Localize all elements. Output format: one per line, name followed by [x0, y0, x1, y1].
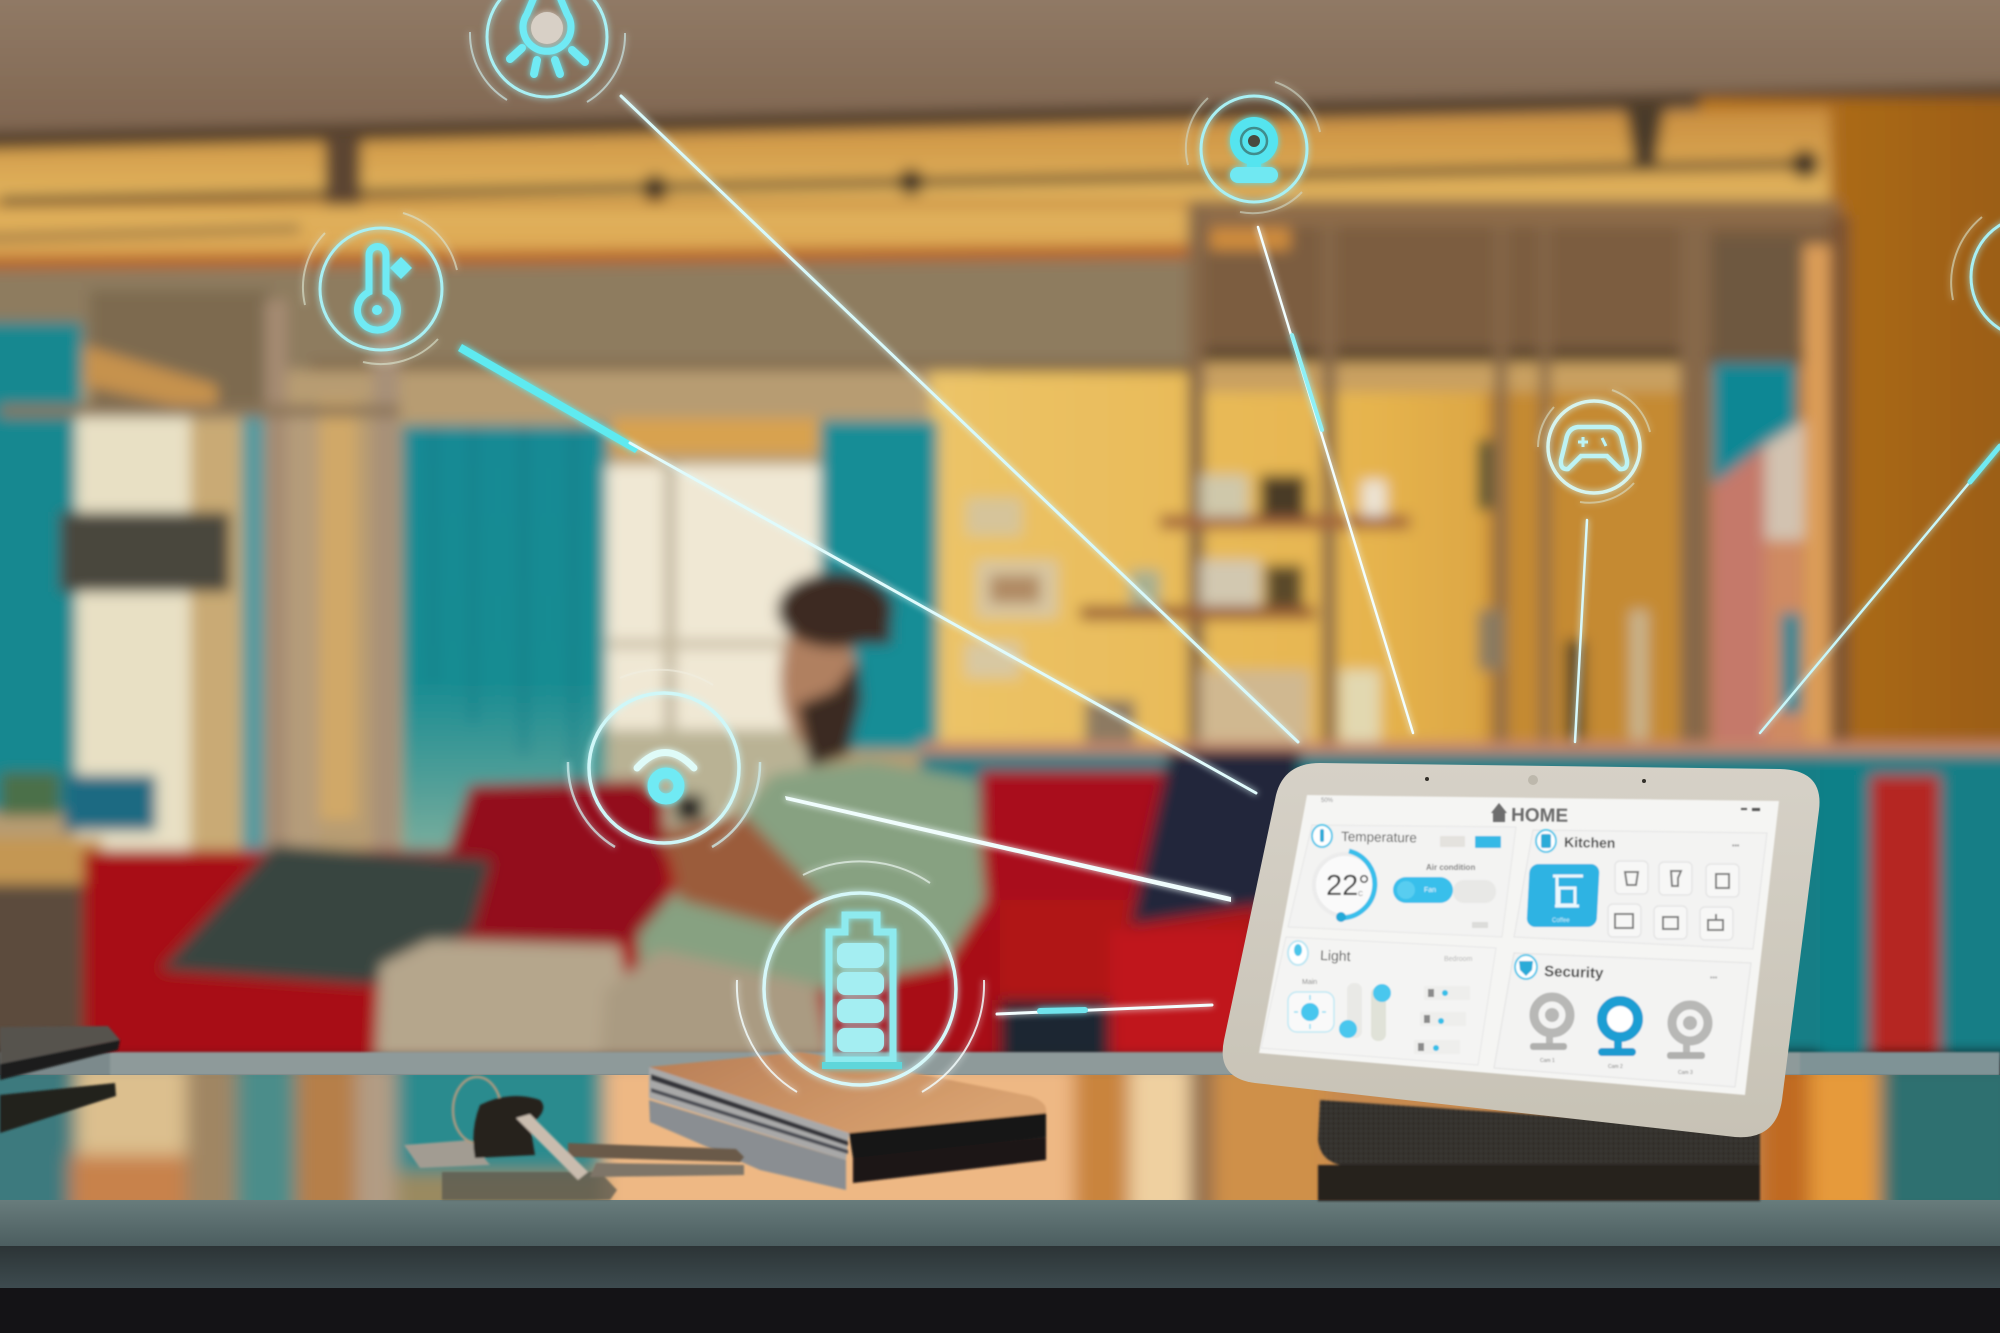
screen — [1259, 795, 1779, 1095]
sofa right cushions — [980, 770, 1180, 930]
panel: light: Bedroom — [1444, 956, 1473, 963]
ceiling light band — [0, 108, 1830, 262]
centre curtain — [402, 425, 608, 855]
home heading — [1491, 803, 1568, 827]
icon: wifi phone hologram — [568, 670, 760, 847]
flat key head — [404, 1140, 490, 1168]
sensors — [1425, 777, 1429, 781]
soffit — [0, 258, 1250, 380]
phone in hand — [675, 795, 703, 821]
yellow wall centre-right — [930, 372, 1730, 762]
panel: temperature: Fan — [1424, 887, 1436, 894]
air condition toggle: Air condition — [1426, 863, 1475, 872]
smart display base — [1318, 1100, 1760, 1201]
appliance tiles — [1608, 861, 1739, 940]
track rod — [0, 160, 1805, 205]
screen content — [1261, 798, 1767, 1087]
panel: kitchen: ••• — [1732, 843, 1740, 850]
lamp — [60, 512, 230, 592]
camera left — [1530, 997, 1570, 1064]
phone front side — [649, 1067, 849, 1160]
hands — [663, 815, 829, 930]
line: camera to display — [1258, 227, 1413, 733]
panel: security — [1494, 953, 1751, 1087]
icon: webcam hologram — [1186, 82, 1320, 213]
line: phone wifi to display — [785, 796, 1231, 902]
brightness sliders — [1347, 983, 1362, 1038]
left curtain — [0, 322, 82, 812]
camera right: Cam 3 — [1678, 1070, 1693, 1076]
light icon — [1288, 941, 1308, 965]
pillars — [242, 415, 264, 855]
wall pictures — [966, 498, 1022, 536]
camera centre active: Cam 2 — [1608, 1064, 1623, 1070]
panel: kitchen — [1514, 830, 1767, 949]
grey pillow — [160, 845, 491, 985]
display bezel — [1223, 763, 1820, 1137]
panel: light: Main — [1302, 979, 1317, 986]
room rows — [1414, 986, 1470, 1054]
icon: light bulb hologram — [470, 0, 625, 102]
window frame posts right — [1188, 205, 1710, 765]
far table band — [0, 1052, 2000, 1076]
dark throw — [1130, 750, 1300, 925]
camera right — [1667, 1005, 1708, 1076]
line: bulb to display — [621, 96, 1298, 742]
counter — [920, 742, 2000, 756]
panel: security: Security — [1544, 963, 1604, 982]
right curtain — [820, 420, 938, 750]
status bar: 50% — [1321, 798, 1334, 804]
sun tile — [1288, 992, 1334, 1032]
mode chips — [1440, 836, 1465, 847]
side table — [64, 775, 156, 831]
icon: battery hologram — [737, 861, 984, 1092]
ceiling — [0, 0, 2000, 150]
person shirt — [638, 760, 985, 990]
panel: light: Light — [1320, 947, 1351, 964]
camera left: Cam 1 — [1540, 1058, 1555, 1064]
panel: kitchen: Kitchen — [1564, 834, 1616, 851]
panel: security: ••• — [1710, 975, 1718, 982]
panel: temperature: C — [1358, 891, 1363, 898]
panel: temperature — [1288, 825, 1516, 937]
key reflection — [442, 1172, 617, 1200]
phone top surface — [649, 1052, 1046, 1133]
blurred living room background — [0, 0, 2000, 1060]
phone lying on table — [649, 1052, 1046, 1190]
status icons — [1741, 808, 1760, 811]
line: battery to display — [997, 1005, 1212, 1014]
sofa back cushion — [446, 780, 665, 950]
thermostat dial — [1314, 854, 1376, 916]
coffee tile — [1526, 864, 1600, 927]
diagonal silver key — [516, 1114, 588, 1180]
panel: light — [1261, 937, 1496, 1065]
icon: game controller hologram — [1538, 390, 1650, 503]
teal and book wall — [1712, 237, 1800, 363]
panel: kitchen: Coffee — [1552, 918, 1570, 924]
table front edge — [0, 1200, 2000, 1246]
home heading: HOME — [1511, 805, 1568, 827]
inner room soffit right — [1190, 205, 1840, 360]
line: gamepad to display — [1575, 520, 1587, 742]
panel: temperature: 22° — [1326, 870, 1370, 902]
phone reflection — [649, 1100, 846, 1190]
left window — [76, 415, 192, 855]
glass table top — [0, 1052, 2000, 1333]
horizontal key blades — [568, 1143, 744, 1162]
shelves with decor — [1080, 440, 1648, 750]
kitchen icon — [1536, 830, 1556, 852]
mirror reflection — [0, 1075, 2000, 1200]
back wall right — [1700, 98, 2000, 758]
key ring — [453, 1077, 501, 1143]
camera centre active — [1598, 1001, 1638, 1070]
lower back wall left-centre — [0, 370, 980, 850]
icon: partial device hologram at right edge — [1951, 216, 2000, 338]
line: right device to display — [1760, 446, 2000, 733]
panel: temperature: Temperature — [1341, 829, 1417, 845]
centre window — [606, 465, 820, 825]
head and hair — [780, 608, 856, 752]
keys — [404, 1077, 744, 1200]
connection lines — [458, 96, 2000, 1014]
security icon — [1515, 955, 1537, 979]
appliance glyphs — [1615, 871, 1729, 930]
icon: thermometer hologram — [303, 213, 457, 364]
line: thermostat to display — [458, 344, 1256, 793]
dark fob — [473, 1096, 543, 1158]
person trousers — [376, 940, 640, 1058]
smart display — [1223, 763, 1820, 1137]
temperature icon — [1312, 825, 1332, 847]
sofa — [83, 850, 1263, 1060]
laptop on left edge — [0, 1026, 120, 1133]
